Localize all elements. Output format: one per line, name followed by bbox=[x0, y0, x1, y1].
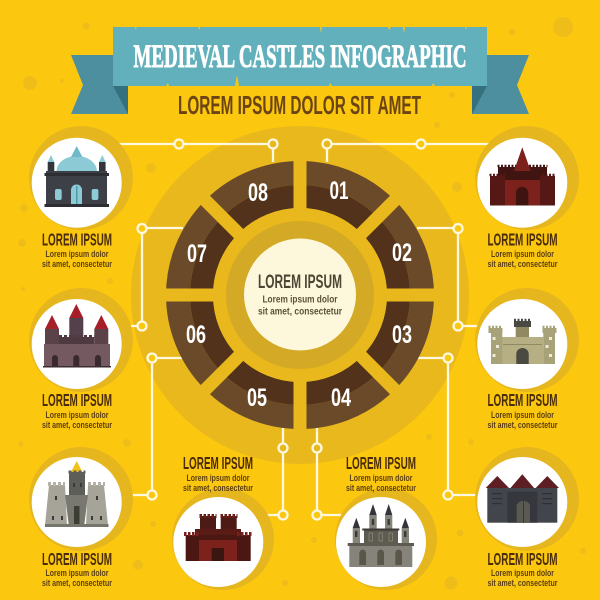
segment numbers bbox=[186, 177, 412, 412]
label: top left: sit amet, consectetur bbox=[42, 259, 112, 269]
icon: dark slate castle bbox=[486, 474, 559, 523]
label: top left: LOREM IPSUM bbox=[42, 230, 112, 250]
label: middle right: sit amet, consectetur bbox=[488, 420, 558, 430]
label: middle left bbox=[42, 390, 112, 430]
label: middle left: sit amet, consectetur bbox=[42, 420, 112, 430]
subtitle: LOREM IPSUM DOLOR SIT AMET bbox=[178, 90, 421, 120]
segment numbers: 06 bbox=[186, 321, 206, 349]
label: top right: Lorem ipsum dolor bbox=[491, 249, 554, 259]
icon: red brick fortress bbox=[184, 516, 253, 561]
label: bottom right: sit amet, consectetur bbox=[488, 578, 558, 588]
label: middle left: LOREM IPSUM bbox=[42, 390, 112, 410]
donut chart: eight segments bbox=[160, 155, 440, 435]
label: bottom left bbox=[42, 549, 112, 588]
segment numbers: 02 bbox=[392, 239, 412, 267]
label: bottom centre right: Lorem ipsum dolor bbox=[350, 473, 413, 483]
segment numbers: 04 bbox=[331, 384, 351, 412]
segment numbers: 08 bbox=[248, 179, 268, 207]
castle card: top left bbox=[29, 126, 133, 269]
label: bottom left: sit amet, consectetur bbox=[42, 578, 112, 588]
castle card: bottom right bbox=[475, 447, 579, 588]
icon: red roof towers castle bbox=[43, 304, 111, 368]
centre circle with text: LOREM IPSUM bbox=[258, 272, 342, 293]
gold wheel backdrop bbox=[131, 126, 469, 464]
label: bottom right: Lorem ipsum dolor bbox=[491, 568, 554, 578]
icon: grey spired castle bbox=[348, 504, 414, 567]
label: bottom centre left bbox=[183, 453, 253, 493]
icon: beige stone castle bbox=[488, 320, 556, 364]
label: middle right: Lorem ipsum dolor bbox=[491, 410, 554, 420]
castle card: bottom centre left bbox=[172, 453, 274, 590]
label: top right: sit amet, consectetur bbox=[488, 259, 558, 269]
connector lines and nodes bbox=[107, 140, 493, 520]
banner ribbon bbox=[71, 27, 529, 114]
label: top right bbox=[488, 230, 558, 269]
castle card: bottom centre right bbox=[335, 453, 437, 590]
label: top left bbox=[42, 230, 112, 269]
icon: grey stone keep with crown bbox=[45, 461, 108, 527]
centre circle with text: sit amet, consectetur bbox=[258, 306, 342, 318]
label: middle left: Lorem ipsum dolor bbox=[46, 410, 109, 420]
castle card: bottom left bbox=[29, 447, 133, 588]
label: bottom centre left: sit amet, consectetur bbox=[183, 483, 253, 493]
label: bottom centre right bbox=[346, 453, 416, 493]
segment numbers: 03 bbox=[392, 321, 412, 349]
label: bottom right bbox=[488, 549, 558, 588]
label: bottom centre right: sit amet, consectetur bbox=[346, 483, 416, 493]
segment numbers: 07 bbox=[187, 240, 207, 268]
segment numbers: 01 bbox=[330, 177, 349, 205]
centre circle with text bbox=[244, 238, 356, 350]
segment numbers: 05 bbox=[247, 384, 267, 412]
label: bottom left: Lorem ipsum dolor bbox=[46, 568, 109, 578]
label: bottom centre left: LOREM IPSUM bbox=[183, 453, 253, 473]
icon: blue dome castle bbox=[44, 146, 109, 207]
label: top left: Lorem ipsum dolor bbox=[46, 249, 109, 259]
label: bottom left: LOREM IPSUM bbox=[42, 549, 112, 569]
label: middle right bbox=[488, 390, 558, 430]
castle card: middle right bbox=[475, 288, 579, 430]
icon: red castle with spire bbox=[490, 147, 556, 206]
label: bottom centre right: LOREM IPSUM bbox=[346, 453, 416, 473]
centre circle with text: Lorem ipsum dolor bbox=[262, 294, 338, 306]
label: bottom centre left: Lorem ipsum dolor bbox=[186, 473, 250, 483]
castle card: top right bbox=[475, 126, 579, 269]
castle card: middle left bbox=[29, 288, 133, 430]
